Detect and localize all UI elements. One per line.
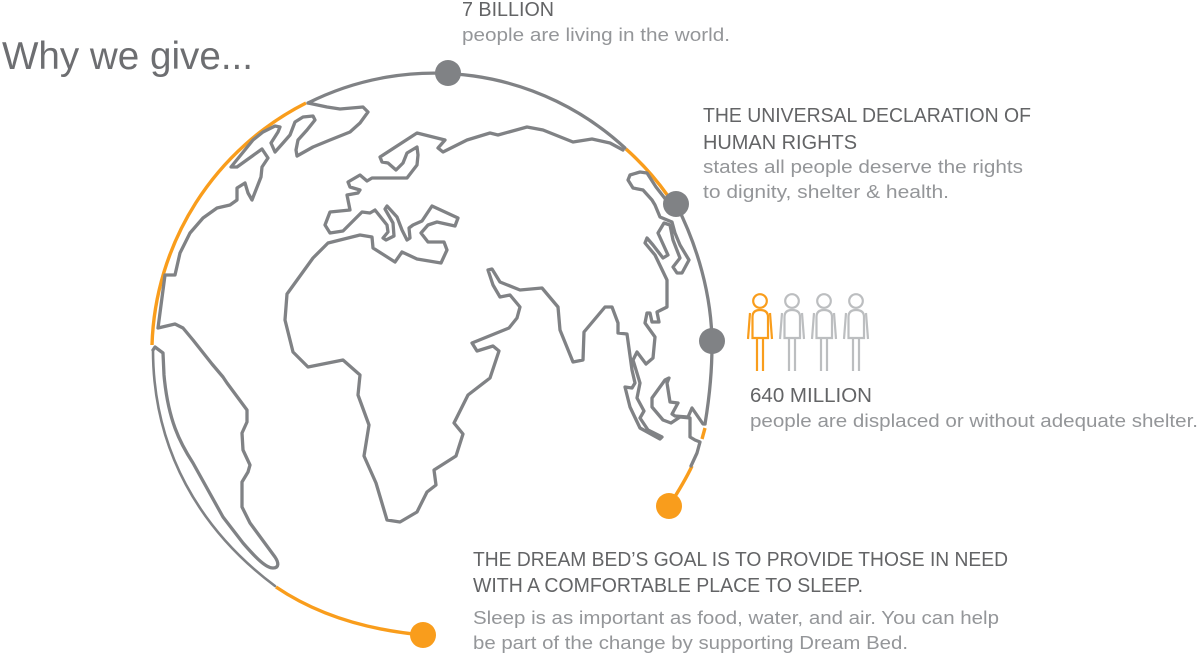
globe rim: upper-left orange arc: [152, 103, 306, 345]
text block: universal declaration of human rights: to dignity, shelter & health.: [703, 181, 949, 202]
text block: universal declaration of human rights: THE UNIVERSAL DECLARATION OF: [703, 104, 1031, 127]
continent: Greenland and the Americas: [153, 103, 368, 568]
text block: 7 billion: [462, 0, 730, 45]
icon: orange person: [748, 294, 772, 371]
text block: 7 billion: people are living in the world.: [462, 24, 730, 45]
text block: 640 million: [750, 384, 1198, 431]
globe illustration: [152, 60, 725, 648]
text block: dream bed goal: WITH A COMFORTABLE PLACE TO SLEEP.: [473, 574, 863, 597]
text block: dream bed goal: THE DREAM BED’S GOAL IS TO PROVIDE THOSE IN NEED: [473, 548, 1008, 571]
text block: universal declaration of human rights: [703, 104, 1031, 202]
text block: 640 million: people are displaced or without adequate shelter.: [750, 410, 1198, 431]
text block: dream bed goal: be part of the change by supporting Dream Bed.: [473, 632, 908, 653]
text block: 640 million: 640 MILLION: [750, 384, 872, 407]
text block: dream bed goal: [473, 548, 1008, 653]
marker: 7 billion dot: [435, 60, 461, 86]
globe rim: orange arc to bottom dot: [276, 587, 423, 635]
globe rim: upper-right orange arc: [626, 149, 668, 196]
globe rim: right grey arc: [676, 204, 712, 424]
pictogram: one in four people: [748, 294, 868, 371]
title: Why we give...: [2, 35, 253, 78]
continent: South America outer coast: [153, 350, 275, 586]
marker: human rights dot: [663, 191, 689, 217]
text block: universal declaration of human rights: states all people deserve the rights: [703, 156, 1023, 177]
icon: grey person 1: [780, 294, 804, 371]
marker: 640 million dot: [699, 328, 725, 354]
icon: grey person 3: [844, 294, 868, 371]
icon: grey person 2: [812, 294, 836, 371]
globe rim: small orange segment: [702, 428, 705, 439]
continent: Eurasia and Africa: [285, 127, 689, 522]
globe rim: top grey arc: [308, 73, 625, 148]
marker: lower right orange dot: [656, 493, 682, 519]
globe rim: orange arc to lower right dot: [669, 466, 692, 506]
text block: dream bed goal: Sleep is as important as food, water, and air. You can help: [473, 607, 999, 628]
marker: bottom orange dot: [410, 622, 436, 648]
continent: Indonesia and Australia edge: [652, 378, 705, 466]
text block: universal declaration of human rights: HUMAN RIGHTS: [703, 131, 857, 154]
